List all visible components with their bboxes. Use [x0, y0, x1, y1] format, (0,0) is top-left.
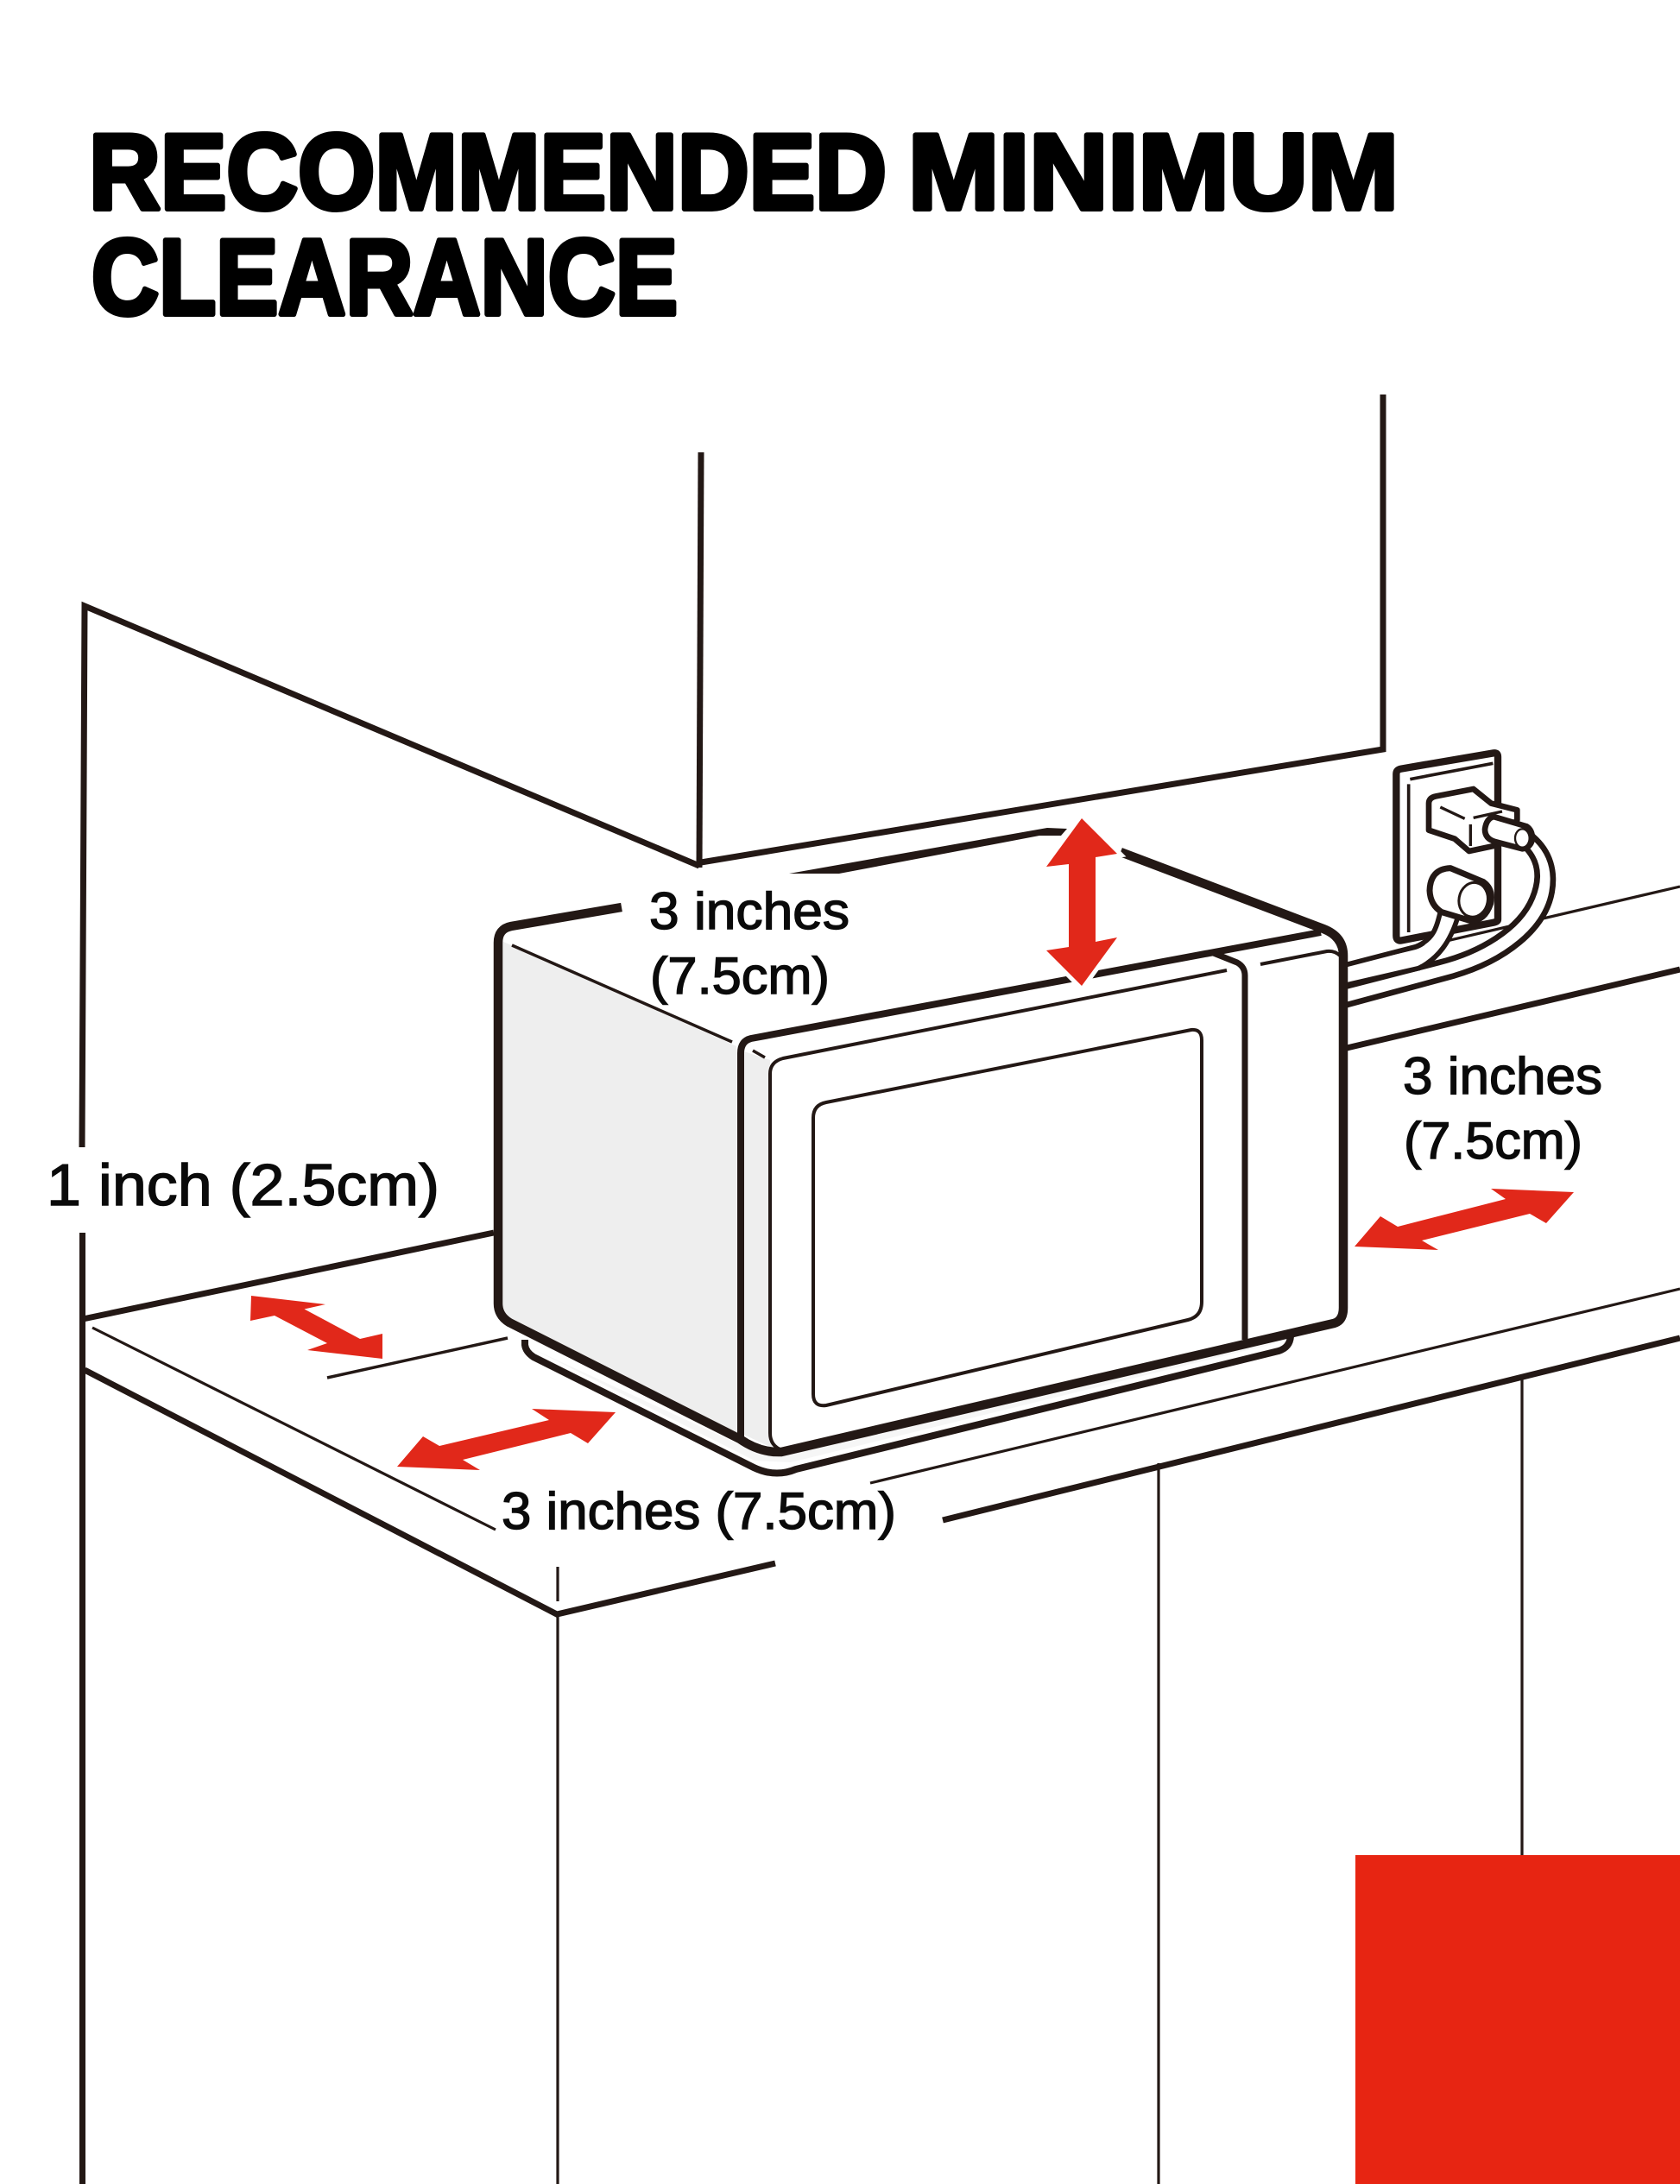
- plug one barrel: [1485, 817, 1532, 849]
- front face: [742, 934, 1340, 1450]
- wall lines: [82, 395, 1383, 2184]
- label: right clearance: 3 inches: [1403, 1047, 1602, 1105]
- plug one: [1429, 789, 1517, 851]
- plug two: [1430, 868, 1491, 921]
- countertop: [85, 887, 1680, 1614]
- side panel: [502, 941, 736, 1437]
- control panel inset: [1260, 951, 1340, 964]
- microwave: [498, 828, 1343, 1474]
- body outline: [498, 852, 1343, 1452]
- door outline: [770, 970, 1227, 1450]
- title: [89, 113, 1399, 338]
- arrow: front clearance: [397, 1409, 616, 1470]
- foot strip: [532, 1342, 1279, 1462]
- front top edge: [741, 932, 1321, 1442]
- cord one: [1344, 836, 1553, 1006]
- label: top clearance: [649, 882, 849, 1005]
- front left strip: [744, 1051, 777, 1450]
- title: CLEARANCE: [92, 218, 678, 338]
- door and control divider: [1211, 952, 1245, 1340]
- red corner block: [1355, 1855, 1680, 2184]
- label: right clearance: [1403, 1047, 1602, 1170]
- base foot: [525, 1334, 1291, 1474]
- cord two: [1344, 912, 1457, 984]
- title: RECOMMENDED: [89, 113, 887, 232]
- label: top clearance: 3 inches: [649, 882, 849, 940]
- label: front clearance: 3 inches (7.5cm): [502, 1482, 896, 1540]
- cabinet lines: [558, 1375, 1522, 2184]
- wall outlet with plugs and cords: [1344, 753, 1553, 1006]
- label: right clearance: (7.5cm): [1404, 1112, 1582, 1170]
- arrow: left clearance: [250, 1296, 382, 1359]
- arrow: right clearance: [1355, 1189, 1574, 1250]
- arrow: top clearance: [1046, 818, 1117, 986]
- outlet plate: [1396, 753, 1498, 941]
- title: MINIMUM: [908, 113, 1399, 232]
- label: left clearance: 1 inch (2.5cm): [47, 1152, 439, 1218]
- label: top clearance: (7.5cm): [650, 947, 830, 1005]
- top back edge: [789, 828, 1067, 874]
- window: [813, 1030, 1202, 1405]
- side top line: [512, 945, 732, 1042]
